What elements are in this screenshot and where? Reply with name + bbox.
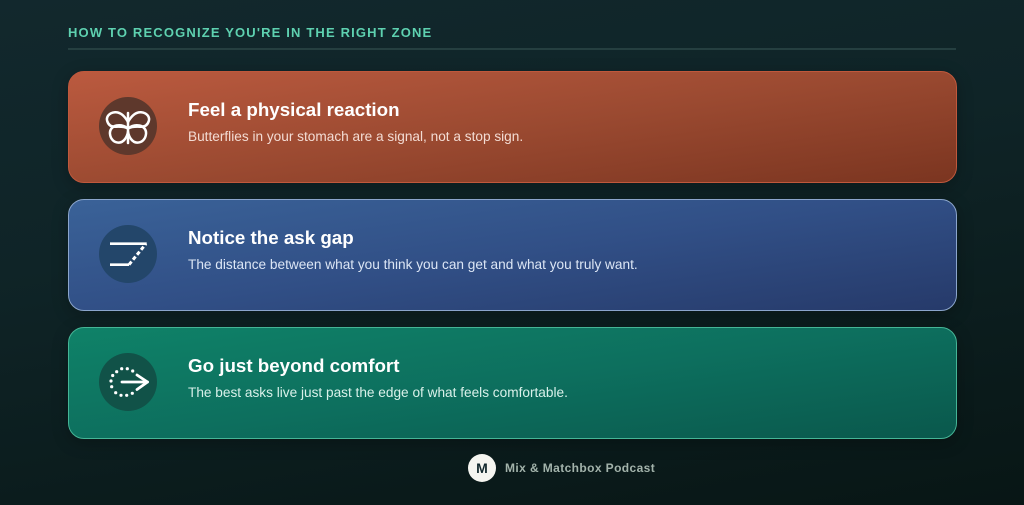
podcast name: Mix & Matchbox Podcast <box>505 461 655 475</box>
text: The best asks live just past the edge of what feels comfortable. <box>188 384 568 400</box>
icon: dotted circle and arrow <box>99 353 157 411</box>
text: Butterflies in your stomach are a signal, not a stop sign. <box>188 128 523 144</box>
icon: logo: M <box>476 460 488 476</box>
heading: Notice the ask gap <box>188 226 354 248</box>
icon: logo <box>468 454 496 482</box>
icon: butterfly <box>99 97 157 155</box>
title: HOW TO RECOGNIZE YOU'RE IN THE RIGHT ZONE <box>68 25 432 40</box>
heading: Feel a physical reaction <box>188 98 400 120</box>
text: The distance between what you think you can get and what you truly want. <box>188 256 638 272</box>
panel: notice the ask gap <box>68 199 957 311</box>
heading: Go just beyond comfort <box>188 354 399 376</box>
panel: go just beyond comfort <box>68 327 957 439</box>
panel: feel a physical reaction <box>68 71 957 183</box>
icon: ask gap <box>99 225 157 283</box>
footer <box>468 454 655 482</box>
